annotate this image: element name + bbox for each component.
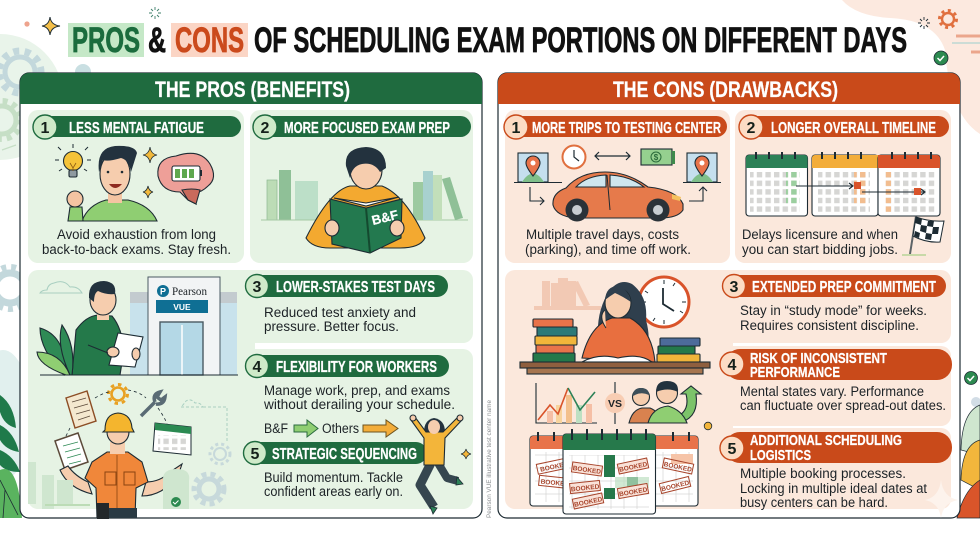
background decoration: top-right blob <box>842 0 980 134</box>
pill heading 4 <box>720 349 952 381</box>
text: reduced anxiety <box>264 305 416 334</box>
illustration: book stack left <box>533 319 577 362</box>
sign: vue: VUE <box>173 302 191 312</box>
ground line <box>40 374 238 376</box>
illustration: wall clock <box>639 277 689 327</box>
decoration: yellow dot <box>704 422 712 430</box>
card 1: less mental fatigue <box>28 110 244 263</box>
text: manage work <box>263 383 455 412</box>
text: build momentum: Build momentum. Tackle <box>264 470 403 485</box>
pill heading 2: MORE FOCUSED EXAM PREP <box>284 120 450 137</box>
illustration: pearson vue test center: P <box>160 286 166 296</box>
icon: orange gear <box>940 10 956 28</box>
calendar 3 <box>878 152 940 216</box>
decoration: spark and lines, top right <box>918 17 980 52</box>
text: manage work: without derailing your schedule. <box>263 397 455 412</box>
title highlight: cons <box>171 23 248 57</box>
sign: pearson logo <box>157 285 169 297</box>
background decoration: bottom-left leaves <box>0 395 22 518</box>
icon: location right <box>683 153 721 182</box>
decoration: spark and dot, top left <box>24 7 161 35</box>
sign: pearson: Pearson <box>172 286 207 298</box>
illustration: three calendars <box>746 152 940 216</box>
text: multiple bookings: Locking in multiple ideal dates at <box>740 481 927 496</box>
text: mental states: can fluctuate over spread-out dates. <box>740 398 946 413</box>
arrow: green <box>294 420 318 437</box>
pros heading: THE PROS (BENEFITS) <box>155 77 350 102</box>
title <box>68 21 907 60</box>
panel: pros <box>20 73 482 519</box>
illustration: cloud <box>40 282 82 293</box>
icon: wrench <box>141 392 165 416</box>
icon: brain with battery <box>158 153 214 204</box>
illustration: bookshelf left <box>261 170 468 220</box>
text: study mode <box>740 303 927 333</box>
pill heading 5: STRATEGIC SEQUENCING <box>272 446 417 463</box>
text: build momentum: confident areas early on. <box>264 484 403 499</box>
pill heading 2: 2 <box>747 120 756 137</box>
illustration: tired student <box>582 282 655 362</box>
icon: vs badge: VS <box>608 398 622 410</box>
illustration: car <box>553 172 683 222</box>
pill heading 1: LESS MENTAL FATIGUE <box>69 120 204 137</box>
panel: cons <box>498 73 960 518</box>
text: avoid exhaustion: Avoid exhaustion from long <box>57 227 216 242</box>
pill heading 4: 4 <box>728 357 737 374</box>
pill heading 4: FLEXIBILITY FOR WORKERS <box>276 359 437 376</box>
illustration: two people with up arrow <box>629 381 701 423</box>
card: lower pros panel <box>28 270 473 519</box>
pill heading 1: 1 <box>41 120 50 137</box>
text: build momentum <box>264 470 403 499</box>
title highlight: pros <box>68 23 144 57</box>
illustration: centre calendar: BOOKED <box>574 496 603 509</box>
decoration: pale sparkle <box>925 480 958 518</box>
title word: and: & <box>148 21 166 60</box>
background decoration: left blobs and gears <box>0 34 91 480</box>
illustration: smiling man <box>67 146 157 221</box>
illustration: left calendar <box>530 432 575 506</box>
pill heading 5: 5 <box>728 441 737 458</box>
title word: pros: PROS <box>72 21 140 60</box>
pill heading 3: 3 <box>730 279 739 296</box>
pill heading 2 <box>739 115 949 139</box>
icon: pale gears <box>194 444 230 504</box>
illustration: centre calendar: BOOKED <box>619 461 648 474</box>
text: multiple travel days: Multiple travel days, costs <box>526 227 679 242</box>
icon: green check, right margin <box>964 372 978 384</box>
background decoration: bottom-right leaves <box>957 397 980 518</box>
illustration: desk <box>520 362 710 374</box>
icon: calendar <box>153 423 191 455</box>
chart: fluctuating line <box>536 383 597 423</box>
text: avoid exhaustion <box>42 227 231 257</box>
vertical credit note: Pearson VUE illustrative test center name <box>487 399 493 518</box>
illustration: student reading <box>306 147 425 253</box>
illustration: pearson vue test center <box>130 277 237 375</box>
icon: vs badge <box>605 382 625 424</box>
text: manage work: Manage work, prep, and exams <box>264 383 450 398</box>
pill heading 5: ADDITIONAL SCHEDULING <box>750 432 902 449</box>
pill heading 1: MORE TRIPS TO TESTING CENTER <box>532 120 721 137</box>
icon: light bulb <box>55 144 91 177</box>
text: delays licensure: you can start bidding jobs. <box>742 242 898 257</box>
illustration: right calendar: BOOKED <box>663 461 693 474</box>
card 2: more focused exam prep <box>250 110 473 263</box>
pill heading 3: LOWER-STAKES TEST DAYS <box>276 279 435 296</box>
cons heading: THE CONS (DRAWBACKS) <box>613 77 838 102</box>
title word: cons: CONS <box>175 21 244 60</box>
illustration: right calendar: BOOKED <box>661 480 690 493</box>
sequence: b&f to others: Others <box>322 421 359 436</box>
pill heading 3 <box>722 274 946 298</box>
illustration: man with paper <box>72 281 143 375</box>
text: multiple travel days <box>525 227 691 257</box>
pill heading 2: 2 <box>261 120 270 137</box>
icon: money <box>641 149 675 165</box>
text: study mode: Stay in “study mode” for weeks. <box>740 303 927 318</box>
pill heading 4: RISK OF INCONSISTENT <box>750 350 887 367</box>
icon: dashed connectors <box>64 390 167 440</box>
illustration: plants <box>37 325 73 375</box>
icon: money: $ <box>654 153 659 162</box>
illustration: book stack right <box>657 338 700 362</box>
text: delays licensure <box>742 227 898 257</box>
icon: clipboard top <box>66 391 96 428</box>
text: reduced anxiety: pressure. Better focus. <box>264 319 399 334</box>
icon: skyline, cloud, check <box>28 400 227 509</box>
sequence: b&f to others: B&F <box>264 421 288 436</box>
illustration: worker in hard hat <box>60 413 182 519</box>
text: multiple bookings <box>740 466 927 510</box>
text: multiple bookings: busy centers can be hard. <box>740 495 888 510</box>
icon: clipboard left <box>55 433 88 470</box>
icon: clock <box>562 146 586 168</box>
calendar 2 <box>812 152 878 216</box>
icon: yellow gear <box>108 384 128 404</box>
pill heading 5 <box>244 442 427 464</box>
icon: sparkles <box>143 147 157 198</box>
cons header bar <box>498 73 960 104</box>
pill heading 4: PERFORMANCE <box>750 364 840 381</box>
pill heading 5 <box>720 432 952 464</box>
book label: B&F <box>370 207 400 228</box>
text: multiple bookings: Multiple booking processes. <box>740 466 906 481</box>
illustration: centre calendar: BOOKED <box>572 465 602 476</box>
text: study mode: Requires consistent discipline. <box>740 318 919 333</box>
text: mental states: Mental states vary. Performance <box>740 384 924 399</box>
illustration: centre calendar: BOOKED <box>619 487 648 498</box>
icon: green check, top right <box>934 51 948 65</box>
pill heading 1 <box>33 115 241 139</box>
illustration: left calendar: BOOKED <box>540 479 570 488</box>
text: avoid exhaustion: back-to-back exams. Stay fresh. <box>42 242 231 257</box>
arrows: date shifts <box>796 183 925 195</box>
icon: location left <box>514 153 562 182</box>
text: reduced anxiety: Reduced test anxiety and <box>264 305 416 320</box>
text: multiple travel days: (parking), and time off work. <box>525 242 691 257</box>
pill heading 5: 5 <box>251 446 260 463</box>
pros header bar <box>20 73 482 104</box>
illustration: faded shelf <box>534 278 601 310</box>
pill heading 5: LOGISTICS <box>750 447 811 464</box>
card 1: more trips <box>504 110 730 263</box>
sequence: b&f to others <box>264 420 398 437</box>
pill heading 1 <box>504 115 727 139</box>
pill heading 4 <box>246 354 449 378</box>
calendar 1 <box>746 152 808 216</box>
card 2: longer timeline <box>735 110 951 263</box>
pill heading 2 <box>253 115 471 139</box>
pill heading 3: 3 <box>253 279 262 296</box>
arrow: double <box>595 152 630 160</box>
card: lower cons panel <box>505 270 958 518</box>
text: delays licensure: Delays licensure and when <box>742 227 898 242</box>
pill heading 1: 1 <box>512 120 521 137</box>
pill heading 3 <box>246 274 448 298</box>
icon: checkered flag <box>902 216 944 255</box>
arrow: orange <box>363 420 398 437</box>
illustration: bookshelf right <box>413 171 463 220</box>
illustration: centre calendar <box>563 429 656 514</box>
text: mental states <box>740 384 946 413</box>
arrows: route <box>530 187 707 205</box>
illustration: jumping woman <box>410 415 471 514</box>
illustration: centre calendar: BOOKED <box>571 483 600 493</box>
pill heading 4: 4 <box>253 359 262 376</box>
illustration: left calendar: BOOKED <box>540 461 569 474</box>
illustration: right calendar <box>650 432 698 506</box>
